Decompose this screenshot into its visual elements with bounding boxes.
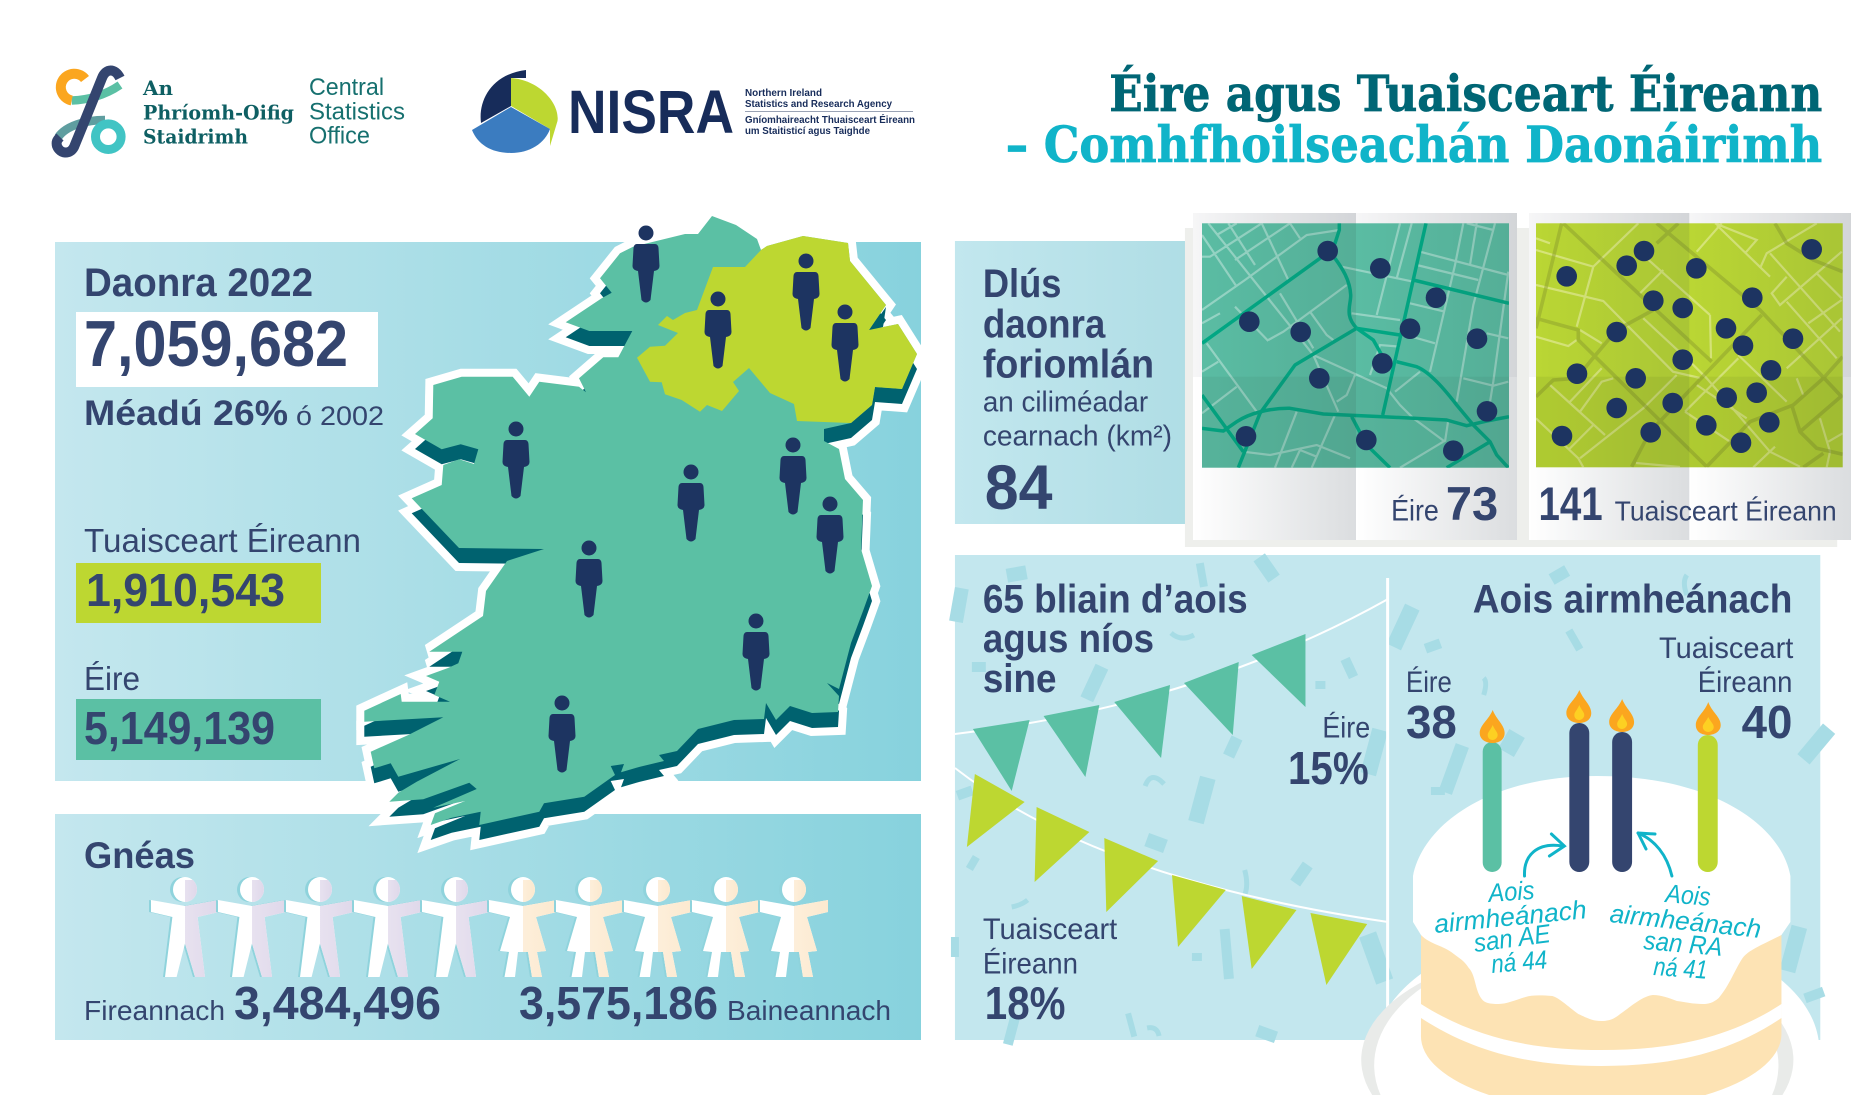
density text block: 84: [985, 453, 1053, 523]
map cards backing shadow: [1185, 228, 1837, 547]
sex panel text: Baineannach: [727, 995, 891, 1026]
population text block: Méadú 26%: [84, 394, 288, 433]
logo: NISRA: Gníomhaireacht Thuaisceart Éireann: [745, 113, 915, 126]
Northern Ireland population box: [76, 563, 321, 623]
over-65 text block: Éire: [1322, 711, 1370, 745]
over-65 text block: Tuaisceart: [983, 913, 1118, 946]
map markers: [1236, 241, 1497, 461]
cake plate: [1361, 925, 1819, 1095]
density text block: an ciliméadar: [983, 386, 1148, 419]
logo: Central Statistics Office: Central: [309, 74, 384, 101]
people on map: [502, 226, 858, 772]
note: EU median age: ná 44: [1490, 944, 1548, 979]
title: [1006, 64, 1822, 174]
divider pole: [1386, 578, 1389, 1040]
note: EU median age: Aois: [1486, 875, 1535, 908]
paper chain of people: [149, 877, 828, 977]
candle: UK: [1609, 699, 1634, 872]
over-65 text block: 15%: [1288, 742, 1369, 794]
logo: NISRA: Statistics and Research Agency: [745, 99, 892, 110]
map region: Northern Ireland: [637, 236, 917, 423]
sex panel text: 3,575,186: [519, 977, 718, 1029]
note: UK median age: airmheánach: [1608, 898, 1763, 944]
density text block: foriomlán: [983, 342, 1154, 387]
logo: Central Statistics Office: [57, 70, 405, 153]
bunting: Northern Ireland: [955, 768, 1388, 985]
median age text block: [1406, 577, 1794, 748]
over-65 text block: agus níos: [983, 617, 1154, 661]
population text block: Daonra 2022: [84, 261, 313, 305]
median age text block: Éire: [1406, 666, 1452, 699]
median age text block: 38: [1406, 696, 1457, 748]
note: UK median age: Aois: [1663, 878, 1712, 912]
arrow: UK median: [1638, 833, 1672, 876]
birthday cake: [1361, 690, 1819, 1095]
sex panel text: [84, 835, 891, 1029]
candle: Northern Ireland: [1696, 702, 1721, 872]
card: Northern Ireland density map: [1529, 213, 1851, 540]
over-65 text block: Éireann: [983, 947, 1078, 981]
note: UK median age: san RA: [1642, 925, 1724, 962]
median age text block: Aois airmheánach: [1473, 577, 1792, 622]
population text block: ó 2002: [296, 401, 384, 431]
logo: NISRA: um Staitisticí agus Taighde: [745, 126, 870, 137]
population text block: 5,149,139: [84, 702, 275, 754]
map card figures: Éire: [1391, 494, 1439, 528]
cake icing: [1413, 776, 1790, 1021]
population text block: 1,910,543: [86, 564, 285, 616]
logo: Central Statistics Office: An: [142, 76, 173, 100]
median age text block: Tuaisceart: [1659, 632, 1794, 665]
map card figures: [1391, 478, 1837, 530]
logo: Central Statistics Office: Staidrimh: [143, 124, 248, 148]
panel: population background: [55, 242, 921, 781]
map card figures: 73: [1446, 478, 1498, 530]
population text block: Tuaisceart Éireann: [84, 522, 361, 559]
panel: sex background: [55, 814, 921, 1040]
logo: Central Statistics Office: Office: [309, 122, 370, 150]
candle: EU: [1566, 690, 1591, 872]
map of Ireland: [364, 216, 917, 840]
note: EU median age: san AE: [1472, 918, 1553, 958]
population text block: 7,059,682: [84, 307, 348, 380]
note: UK median age: ná 41: [1653, 951, 1709, 985]
note: EU median age: airmheánach: [1433, 894, 1588, 939]
icon: NISRA pie mark: [472, 70, 558, 153]
over-65 text block: 65 bliain d’aois: [983, 577, 1248, 622]
logo: NISRA: NISRA: [568, 78, 734, 146]
density text block: Dlús: [983, 262, 1061, 306]
population text block: Éire: [84, 660, 140, 697]
density text block: [983, 262, 1172, 523]
over-65 text block: 18%: [985, 977, 1065, 1029]
density text block: cearnach (km²): [983, 420, 1172, 453]
panel: density background: [955, 241, 1527, 524]
arrow: EU median: [1524, 834, 1564, 876]
map card figures: Tuaisceart Éireann: [1615, 495, 1837, 527]
bunting: Ireland: [955, 599, 1388, 791]
confetti: [949, 553, 1835, 1046]
density text block: daonra: [983, 302, 1106, 347]
Ireland population box: [76, 699, 321, 760]
sex panel text: Gnéas: [84, 835, 195, 876]
logo: Central Statistics Office: Statistics: [309, 98, 405, 126]
icon: CSO knot mark: [57, 70, 121, 153]
card: Ireland density map: [1193, 213, 1517, 540]
median age text block: 40: [1742, 696, 1792, 748]
logo: NISRA: Northern Ireland: [745, 88, 822, 99]
cake body: [1421, 900, 1781, 1095]
cake cream layer: [1421, 1004, 1781, 1066]
candle: Ireland: [1480, 710, 1505, 872]
over-65 text block: sine: [983, 657, 1057, 701]
logo: NISRA: [472, 70, 915, 153]
median age text block: Éireann: [1698, 666, 1792, 699]
note: EU median age: [1433, 875, 1588, 979]
map card figures: 141: [1538, 478, 1603, 530]
over-65 text block: [983, 577, 1370, 1029]
logo: Central Statistics Office: Phríomh-Oifig: [143, 100, 294, 124]
note: UK median age: [1608, 878, 1763, 985]
population text block: [76, 261, 384, 760]
sex panel text: Fireannach: [84, 995, 225, 1026]
sex panel text: 3,484,496: [234, 977, 441, 1029]
panel: age background: [955, 555, 1820, 1040]
total population box: [76, 312, 378, 387]
map markers: [1552, 239, 1822, 453]
